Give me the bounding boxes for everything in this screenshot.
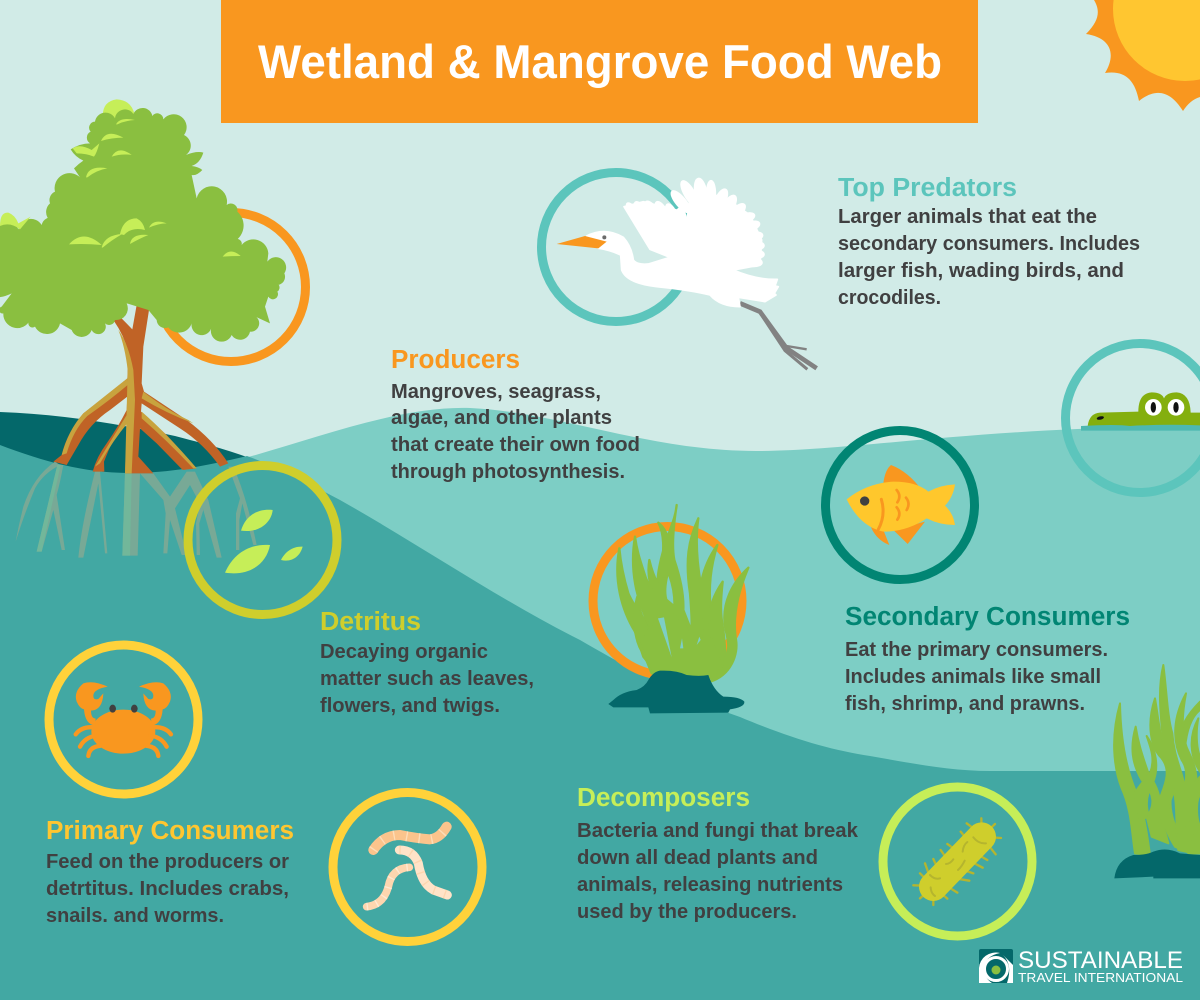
heading: detritus: Detritus — [320, 608, 421, 636]
text block: primary consumers: snails. and worms. — [46, 905, 224, 927]
icon: seagrass — [608, 505, 748, 713]
panel: right seagrass — [1114, 665, 1200, 878]
heading: decomposers: Decomposers — [577, 784, 750, 812]
tree leaf highlights — [0, 119, 241, 257]
logo mark — [979, 949, 1013, 983]
heading: top predators: Top Predators — [838, 174, 1017, 202]
logo wordmark: TRAVEL INTERNATIONAL — [1018, 970, 1183, 985]
text block: decomposers: animals, releasing nutrients — [577, 874, 843, 896]
icon: crab — [76, 682, 171, 756]
panel: producers icon (seagrass) — [593, 505, 748, 713]
ring: worms — [333, 792, 482, 942]
icon: fish — [847, 465, 955, 545]
seagrass gaps — [658, 576, 701, 657]
background: dark shoreline hill — [0, 412, 260, 490]
panel: primary consumers icon — [49, 645, 198, 794]
heading: primary consumers: Primary Consumers — [46, 817, 294, 845]
panel: top predators text — [838, 174, 1140, 309]
panel: detritus icon — [188, 466, 337, 614]
text block: detritus: Decaying organic — [320, 641, 488, 663]
ring: secondary consumers — [826, 430, 974, 580]
ring: top predators — [542, 172, 690, 322]
tree trunk and roots — [53, 302, 228, 473]
sun — [1086, 0, 1200, 111]
text block: secondary consumers: Includes animals like small — [845, 666, 1101, 688]
ring: primary consumers — [49, 645, 198, 794]
panel: secondary consumers icon — [826, 430, 974, 580]
icon: egret — [557, 178, 817, 369]
title banner: Wetland & Mangrove Food Web — [258, 35, 942, 88]
icon: mangrove tree — [0, 99, 286, 558]
panel: detritus text — [320, 608, 534, 717]
text block: secondary consumers — [845, 639, 1108, 715]
panel: decomposers text — [577, 784, 859, 923]
text block: primary consumers — [46, 851, 289, 927]
text block: primary consumers: Feed on the producers or — [46, 851, 289, 873]
text block: detritus: flowers, and twigs. — [320, 695, 500, 717]
icon: crocodile — [1081, 392, 1200, 431]
icon: right seagrass — [1114, 665, 1200, 878]
logo wordmark: SUSTAINABLE — [1018, 947, 1183, 974]
ring: detritus — [188, 466, 337, 614]
ring: crocodile — [1066, 344, 1200, 492]
text block: producers — [391, 381, 640, 483]
text block: decomposers: down all dead plants and — [577, 847, 818, 869]
panel: crocodile icon — [1081, 392, 1200, 431]
text block: primary consumers: detrtitus. Includes crabs, — [46, 878, 289, 900]
text block: top predators: larger fish, wading birds, and — [838, 260, 1124, 282]
text block: top predators: secondary consumers. Includes — [838, 233, 1140, 255]
ring: producers — [156, 212, 306, 362]
text block: detritus: matter such as leaves, — [320, 668, 534, 690]
background: deep teal water — [0, 445, 1200, 1000]
tree top highlight — [103, 99, 135, 122]
text block: top predators: Larger animals that eat the — [838, 206, 1097, 228]
text block: producers: algae, and other plants — [391, 407, 612, 429]
panel: producers text — [391, 346, 640, 483]
submerged roots — [16, 462, 257, 558]
icon: leaves — [225, 510, 303, 573]
panel: top predators icon (egret) — [542, 172, 817, 369]
icon: worms — [367, 827, 447, 907]
panel: secondary consumers text — [845, 603, 1130, 715]
text block: detritus — [320, 641, 534, 717]
heading: producers: Producers — [391, 346, 520, 374]
text block: producers: through photosynthesis. — [391, 461, 625, 483]
text block: decomposers: used by the producers. — [577, 901, 797, 923]
text block: secondary consumers: fish, shrimp, and prawns. — [845, 693, 1085, 715]
panel: primary consumers text — [46, 817, 294, 927]
heading: secondary consumers: Secondary Consumers — [845, 603, 1130, 631]
icon: bacterium — [913, 818, 1001, 905]
text block: top predators — [838, 206, 1140, 309]
ring: seagrass — [593, 526, 742, 676]
seabed mound — [608, 671, 744, 713]
background: light water — [245, 408, 1200, 1000]
text block: secondary consumers: Eat the primary consumers. — [845, 639, 1108, 661]
tree canopy — [0, 108, 286, 342]
text block: decomposers — [577, 820, 859, 923]
text block: decomposers: Bacteria and fungi that break — [577, 820, 859, 842]
logo: sustainable travel international — [979, 947, 1183, 985]
text block: producers: that create their own food — [391, 434, 640, 456]
trunk highlights — [62, 330, 197, 473]
panel: decomposers icon — [883, 787, 1032, 936]
text block: producers: Mangroves, seagrass, — [391, 381, 601, 403]
ring: decomposers — [883, 787, 1032, 936]
title banner — [221, 0, 978, 123]
panel: worms icon — [333, 792, 482, 942]
text block: top predators: crocodiles. — [838, 287, 941, 309]
